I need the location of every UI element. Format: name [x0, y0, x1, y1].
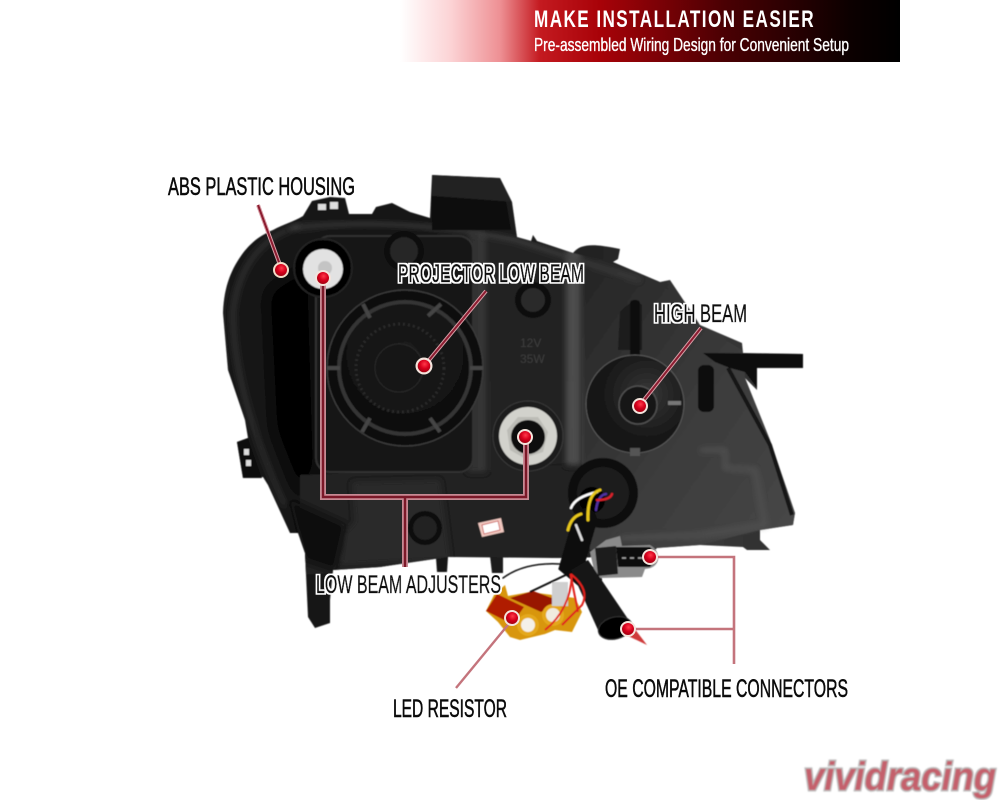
bracket arm — [703, 353, 803, 388]
marker dots — [273, 262, 658, 637]
callout line: ABS plastic housing — [258, 205, 280, 265]
lower recess — [336, 510, 447, 570]
lower round plug — [408, 511, 442, 545]
high beam dome — [586, 300, 684, 456]
center panel — [488, 239, 562, 468]
embossed 12V text: 12V — [520, 336, 541, 350]
dot: high beam — [632, 398, 648, 414]
callout line: low beam adjusters — [323, 278, 526, 567]
housing silhouette — [223, 175, 803, 628]
top tab light — [432, 175, 512, 202]
right body edge — [728, 368, 792, 515]
top clip holes — [318, 202, 338, 210]
callout line: OE compatible connectors — [628, 557, 734, 664]
embossed 35W text: 35W — [520, 352, 545, 366]
upper low beam adjuster — [294, 239, 352, 297]
lower body — [300, 465, 590, 575]
light stripe right — [566, 250, 581, 465]
round plug top — [384, 231, 424, 271]
connector — [590, 536, 658, 578]
projector panel — [316, 236, 473, 472]
dot: projector — [416, 358, 432, 374]
label: projector low beam: PROJECTOR LOW BEAM — [398, 260, 584, 288]
side bracket left — [237, 438, 262, 478]
tube — [571, 560, 647, 645]
label: OE compatible connectors: OE COMPATIBLE CONNECTORS — [605, 675, 848, 703]
headlight housing — [223, 175, 803, 645]
label: ABS plastic housing: ABS PLASTIC HOUSING — [168, 173, 355, 201]
lower dark corner — [290, 500, 345, 570]
label: high beam: HIGH BEAM — [654, 300, 747, 328]
light stripe left — [468, 232, 486, 472]
top rib — [290, 224, 640, 280]
callout line: high beam — [640, 328, 701, 405]
side socket — [698, 365, 714, 412]
right body inner step — [620, 450, 765, 538]
dot: connector — [642, 549, 658, 565]
top tab dark — [432, 195, 511, 230]
dot: plastic housing — [273, 262, 289, 278]
lower low beam adjuster — [493, 401, 563, 471]
dot: upper adjuster — [315, 270, 331, 286]
dot: LED resistor — [504, 610, 520, 626]
round plug right — [515, 282, 551, 318]
callout line: LED resistor — [456, 620, 512, 688]
banner — [400, 0, 900, 62]
LED resistor — [486, 572, 584, 640]
red wire tip — [624, 628, 647, 645]
dot: tube — [620, 621, 636, 637]
label: LED resistor: LED RESISTOR — [393, 695, 507, 723]
banner title: MAKE INSTALLATION EASIER — [534, 6, 815, 33]
wire grommet — [568, 458, 638, 528]
right body panel — [582, 300, 795, 550]
inner shell rim — [233, 226, 300, 505]
wiring loom — [503, 490, 612, 580]
banner subtitle: Pre-assembled Wiring Design for Convenient Setup — [534, 35, 849, 55]
callout line: projector low beam — [425, 291, 486, 365]
dark cavity — [265, 262, 318, 500]
sticker — [478, 518, 504, 537]
label: low beam adjusters: LOW BEAM ADJUSTERS — [316, 571, 501, 599]
dot: lower adjuster — [517, 429, 533, 445]
projector low beam cap — [327, 290, 483, 446]
interior shading — [233, 175, 795, 575]
